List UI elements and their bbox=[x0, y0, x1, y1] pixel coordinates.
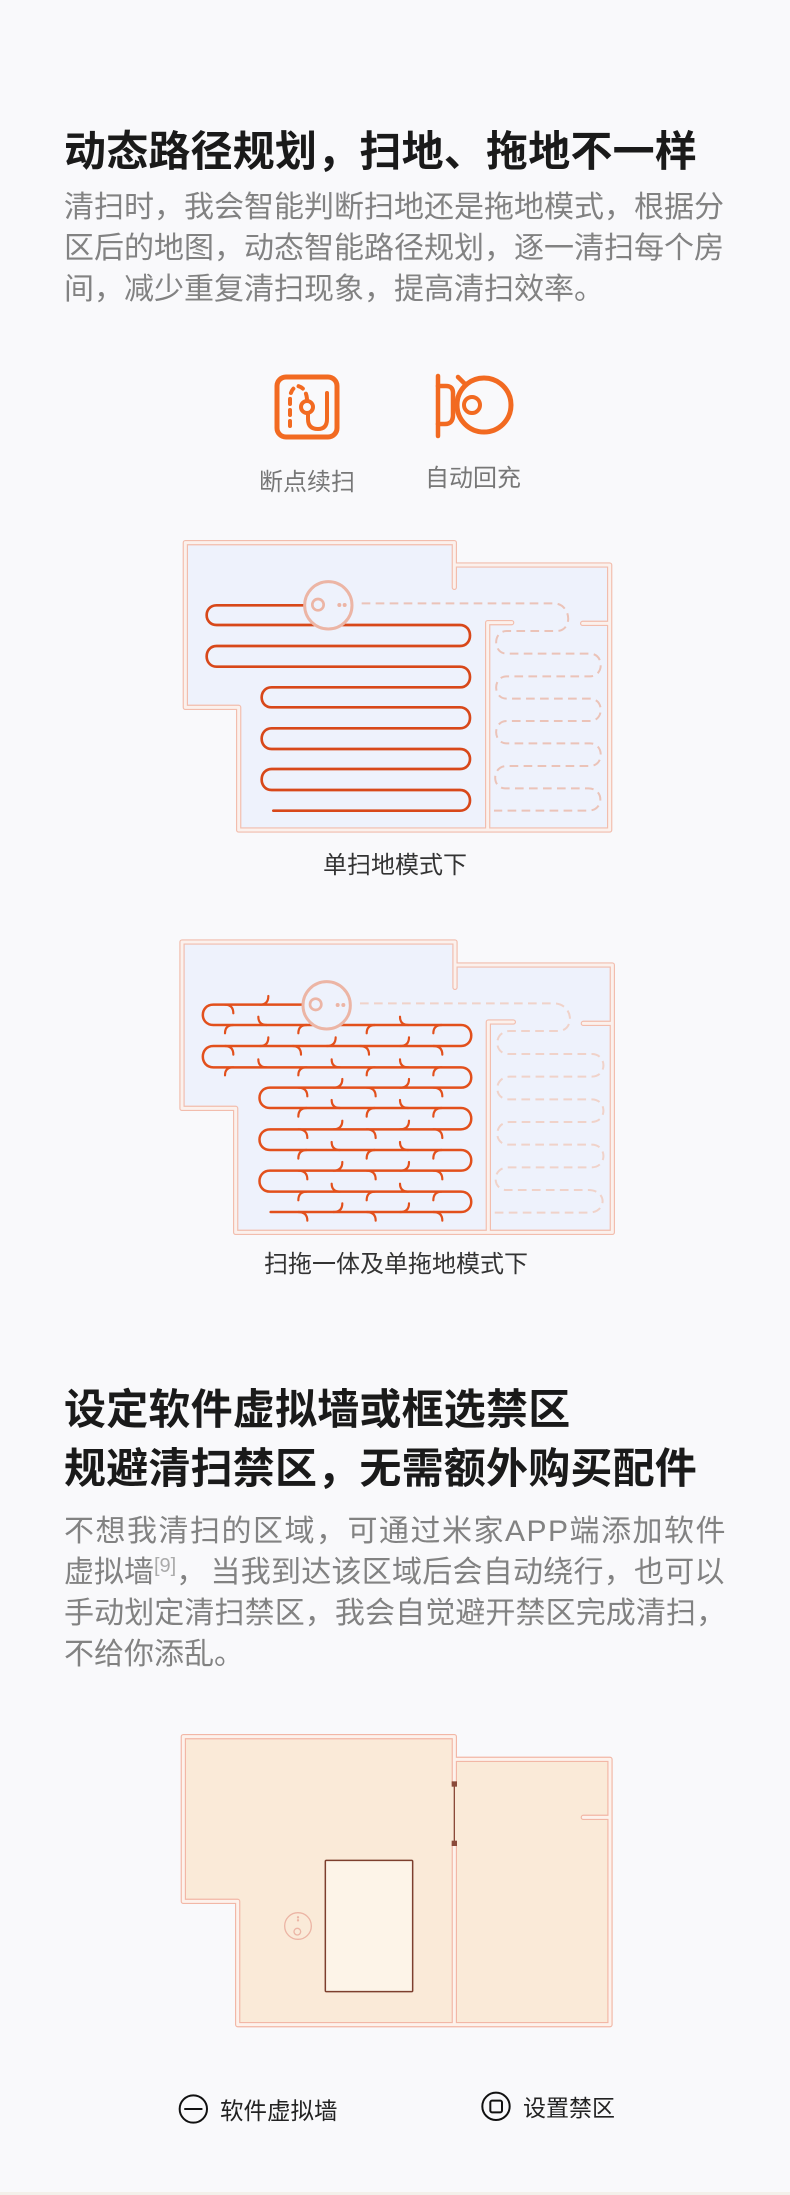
legend label: set no-go zone: 设置禁区 bbox=[523, 2095, 615, 2121]
heading: virtual wall and no-go zones: 规避清扫禁区，无需额外购买配件 bbox=[64, 1445, 697, 1492]
text block: path planning description bbox=[64, 191, 724, 306]
icon: auto recharge bbox=[436, 374, 514, 438]
icon: breakpoint resume bbox=[274, 374, 340, 440]
robot bbox=[285, 1913, 311, 1939]
no-go zone bbox=[325, 1860, 413, 1992]
text block: virtual wall description bbox=[64, 1515, 727, 1671]
text block: virtual wall description: 虚拟墙[9]，当我到达该区域后会自动绕行，也可以 bbox=[64, 1555, 725, 1589]
title: dynamic path planning: 动态路径规划，扫地、拖地不一样 bbox=[64, 128, 697, 175]
label: breakpoint resume: 断点续扫 bbox=[259, 469, 355, 496]
legend label: software virtual wall: 软件虚拟墙 bbox=[220, 2098, 338, 2124]
text block: path planning description: 清扫时，我会智能判断扫地还是拖地模式，根据分 bbox=[64, 191, 724, 224]
caption: sweep mode: 单扫地模式下 bbox=[323, 852, 467, 879]
text block: virtual wall description: 不想我清扫的区域，可通过米家APP端添加软件 bbox=[64, 1515, 727, 1548]
virtual wall bbox=[452, 1781, 457, 1846]
text block: virtual wall description: 不给你添乱。 bbox=[64, 1638, 244, 1671]
floor plan: sweep and mop mode bbox=[179, 939, 615, 1235]
text block: path planning description: 间，减少重复清扫现象，提高清扫效率。 bbox=[64, 273, 604, 306]
floor plan: sweep mode bbox=[182, 540, 612, 833]
heading: virtual wall and no-go zones: 设定软件虚拟墙或框选禁区 bbox=[64, 1386, 570, 1433]
heading: virtual wall and no-go zones bbox=[64, 1386, 697, 1492]
label: auto recharge: 自动回充 bbox=[425, 465, 521, 492]
text block: path planning description: 区后的地图，动态智能路径规划，逐一清扫每个房 bbox=[64, 232, 724, 265]
caption: sweep and mop mode: 扫拖一体及单拖地模式下 bbox=[264, 1251, 528, 1278]
text block: virtual wall description: 手动划定清扫禁区，我会自觉避开禁区完成清扫， bbox=[64, 1597, 726, 1630]
bottom strip bbox=[0, 2192, 790, 2195]
